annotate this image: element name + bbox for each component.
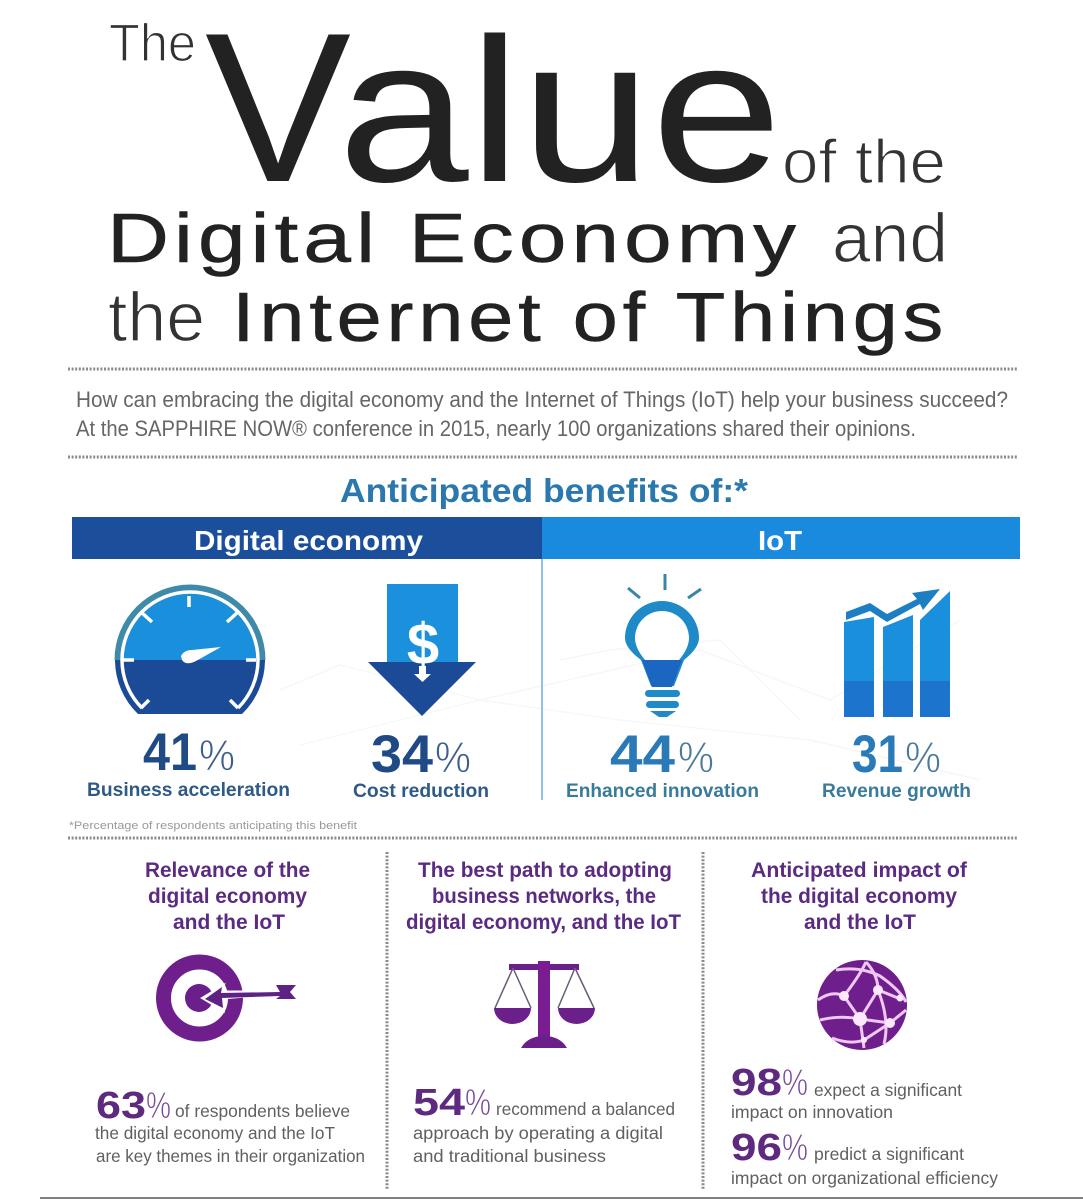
title: The xyxy=(109,14,196,73)
stat text: 98% xyxy=(731,1062,962,1122)
heading: anticipated impact: the digital economy xyxy=(761,885,957,908)
stat text: 54%: recommend a balanced xyxy=(496,1099,675,1119)
heading: relevance: and the IoT xyxy=(173,911,285,934)
icon: dollar down arrow: $ xyxy=(407,612,439,677)
stat text: 63%: 63 xyxy=(96,1085,146,1127)
stat text: 96%: % xyxy=(782,1127,808,1168)
stat: 31% revenue growth: % xyxy=(905,733,941,782)
stat: 34% cost reduction xyxy=(353,725,489,802)
stat text: 98%: expect a significant xyxy=(814,1080,962,1100)
title: the xyxy=(108,278,205,356)
stat text: 63%: are key themes in their organization xyxy=(96,1146,365,1166)
title: of the xyxy=(782,128,946,197)
stat text: 96%: 96 xyxy=(731,1127,782,1169)
stat text: 54% xyxy=(413,1082,675,1166)
heading: best path: digital economy, and the IoT xyxy=(406,911,681,934)
stat: 34% cost reduction: Cost reduction xyxy=(353,781,489,802)
stat: 44% enhanced innovation xyxy=(566,725,759,802)
stat text: 96%: predict a significant xyxy=(814,1144,964,1164)
heading: anticipated benefits: Anticipated benefits of:* xyxy=(340,472,748,509)
intro text xyxy=(76,387,1008,441)
heading: best path xyxy=(406,859,681,934)
stat: 41% business acceleration: Business acceleration xyxy=(87,780,290,801)
title: Internet of Things xyxy=(232,278,948,356)
stat: 31% revenue growth: 31 xyxy=(852,725,903,784)
footnote: *Percentage of respondents anticipating this benefit xyxy=(69,820,357,832)
stat text: 54%: % xyxy=(465,1082,491,1123)
icon: light bulb xyxy=(625,574,701,717)
icon: growth chart xyxy=(844,589,950,717)
banner: IoT xyxy=(542,517,1020,559)
stat: 34% cost reduction: 34 xyxy=(371,725,434,784)
stat text: 54%: and traditional business xyxy=(413,1146,606,1166)
banner: IoT: IoT xyxy=(758,525,802,556)
title: alue xyxy=(338,0,782,225)
stat text: 54%: 54 xyxy=(413,1082,465,1124)
title: and xyxy=(832,199,948,277)
stat text: 63%: of respondents believe xyxy=(175,1101,350,1121)
heading: relevance: Relevance of the xyxy=(145,859,310,882)
icon: network globe xyxy=(817,960,907,1050)
stat text: 96%: impact on organizational efficiency xyxy=(731,1168,998,1188)
stat text: 54%: approach by operating a digital xyxy=(413,1123,663,1143)
banner: digital economy xyxy=(72,517,542,559)
icon: target and arrow xyxy=(164,962,296,1034)
stat: 41% business acceleration: 41 xyxy=(143,723,197,782)
stat: 31% revenue growth: Revenue growth xyxy=(822,781,971,802)
heading: best path: The best path to adopting xyxy=(418,859,672,882)
stat: 44% enhanced innovation: Enhanced innovation xyxy=(566,781,759,802)
stat text: 63%: the digital economy and the IoT xyxy=(95,1123,335,1143)
icon: dollar down arrow xyxy=(368,584,476,716)
stat: 34% cost reduction: % xyxy=(435,733,471,782)
stat: 31% revenue growth xyxy=(822,725,971,802)
stat text: 98%: 98 xyxy=(731,1062,782,1104)
icon: speedometer xyxy=(114,584,266,714)
intro text: How can embracing the digital economy and the Internet of Things (IoT) help your business succeed? xyxy=(76,387,1008,412)
stat: 41% business acceleration: % xyxy=(199,731,235,780)
stat: 44% enhanced innovation: 44 xyxy=(610,725,676,784)
heading: relevance: digital economy xyxy=(148,885,307,908)
stat text: 96% xyxy=(731,1127,998,1188)
banner: digital economy: Digital economy xyxy=(194,525,423,556)
title: Digital Economy xyxy=(107,199,801,277)
title xyxy=(107,0,948,356)
stat text: 63% xyxy=(95,1085,365,1166)
heading: relevance xyxy=(145,859,310,934)
stat text: 98%: impact on innovation xyxy=(731,1102,893,1122)
intro text: At the SAPPHIRE NOW® conference in 2015, nearly 100 organizations shared their opinions. xyxy=(76,416,916,441)
heading: anticipated impact: and the IoT xyxy=(804,911,916,934)
heading: anticipated impact: Anticipated impact of xyxy=(751,859,968,882)
heading: anticipated impact xyxy=(751,859,968,934)
stat: 44% enhanced innovation: % xyxy=(678,733,714,782)
stat: 41% business acceleration xyxy=(87,723,290,801)
heading: best path: business networks, the xyxy=(432,885,656,908)
icon: balance scales xyxy=(494,961,595,1048)
stat text: 98%: % xyxy=(782,1062,808,1103)
stat text: 63%: % xyxy=(146,1085,171,1126)
